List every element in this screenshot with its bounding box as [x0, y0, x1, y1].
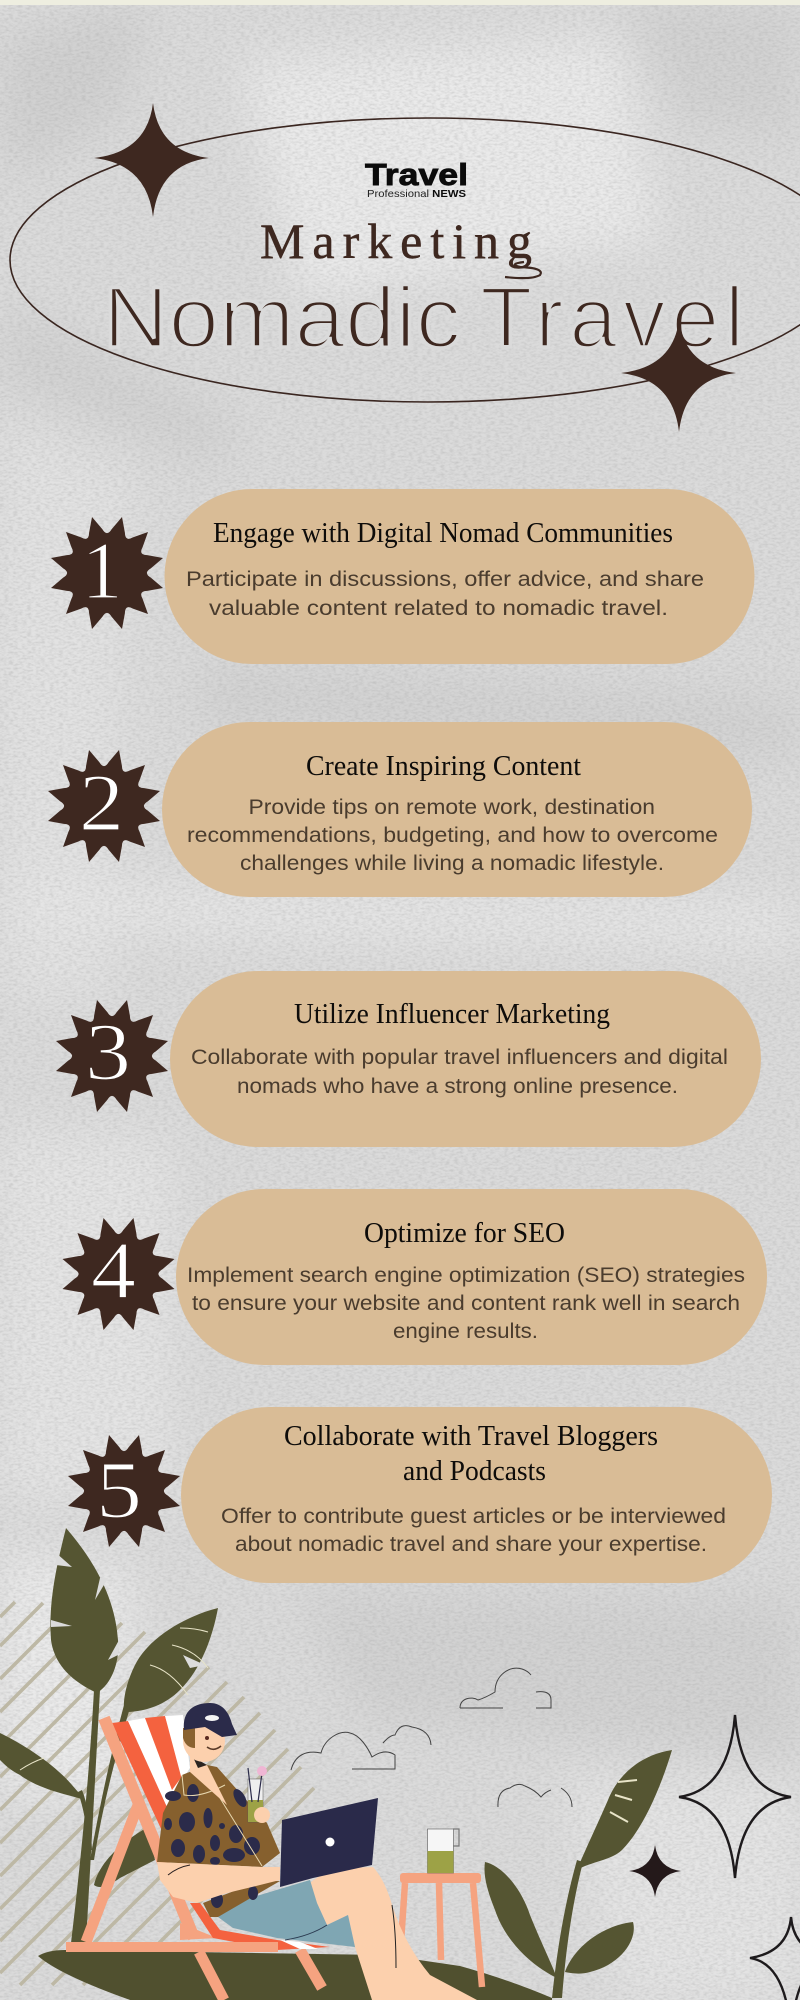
- body 3: Collaborate with popular travel influencers and digital: [191, 1046, 728, 1069]
- plant: left palm leaves: [0, 1528, 218, 1943]
- heading 5: and Podcasts: [403, 1456, 546, 1487]
- body 2: Provide tips on remote work, destination: [248, 796, 655, 819]
- diagonal stripes backdrop: [0, 1602, 314, 1985]
- badge 3: [56, 1000, 168, 1112]
- body 1: [186, 568, 704, 620]
- ground: [38, 1950, 552, 2000]
- badge 4: [62, 1218, 174, 1330]
- cap: [184, 1703, 237, 1737]
- pill 1: [164, 489, 754, 664]
- number 4: 4: [91, 1225, 136, 1316]
- title: Marketing: Marketing: [260, 213, 532, 269]
- number 5: 5: [96, 1444, 142, 1535]
- body 2: recommendations, budgeting, and how to overcome: [187, 824, 718, 847]
- heading 2: Create Inspiring Content: [306, 751, 581, 782]
- title oval outline: [10, 118, 800, 402]
- pill 2: [162, 722, 752, 897]
- heading 4: Optimize for SEO: [364, 1218, 565, 1249]
- title: Nomadic Travel: Nomadic: [103, 270, 461, 366]
- body 5: [221, 1505, 726, 1556]
- body 1: valuable content related to nomadic travel.: [209, 597, 668, 620]
- body 5: about nomadic travel and share your expertise.: [235, 1533, 707, 1556]
- body 5: Offer to contribute guest articles or be interviewed: [221, 1505, 726, 1528]
- badge 2: [48, 750, 160, 862]
- deck chair: [66, 1715, 330, 2000]
- body 1: Participate in discussions, offer advice, and share: [186, 568, 704, 591]
- step 3: [56, 971, 761, 1147]
- arm: [157, 1862, 280, 1903]
- plant: right palm: [484, 1750, 672, 1998]
- badge 5: [68, 1435, 180, 1547]
- number 1: 1: [82, 525, 122, 616]
- heading 5: [284, 1421, 658, 1487]
- number 2: 2: [79, 757, 124, 848]
- body 4: engine results.: [393, 1320, 538, 1343]
- body 2: challenges while living a nomadic lifestyle.: [240, 852, 664, 875]
- icon: outline sparkle: [679, 1715, 791, 1878]
- step 1: [51, 489, 754, 664]
- heading 3: Utilize Influencer Marketing: [294, 999, 610, 1030]
- heading 1: Engage with Digital Nomad Communities: [213, 518, 673, 549]
- pill 5: [181, 1407, 772, 1583]
- neck and face: [190, 1755, 227, 1805]
- number 3: 3: [85, 1006, 131, 1097]
- icon: small dark sparkle: [629, 1845, 681, 1897]
- logo: Travel Professional News: Professional NEWS: [367, 188, 466, 200]
- step 2: [48, 722, 752, 897]
- icon: outline sparkle bottom corner: [750, 1917, 800, 2000]
- heading 5: Collaborate with Travel Bloggers: [284, 1421, 658, 1452]
- logo: Travel Professional News: Travel: [365, 157, 468, 192]
- step 5: [68, 1407, 772, 1583]
- person: [157, 1703, 477, 2000]
- clouds: [291, 1668, 572, 1807]
- body 4: [187, 1264, 745, 1343]
- body 3: [191, 1046, 728, 1098]
- pill 3: [170, 971, 761, 1147]
- laptop: [280, 1798, 378, 1887]
- leg and shorts: [310, 1867, 477, 2000]
- step 4: [62, 1189, 767, 1365]
- leopard shirt: [157, 1765, 280, 1867]
- body 4: to ensure your website and content rank well in search: [192, 1292, 740, 1315]
- side table with pitcher: [398, 1829, 482, 1987]
- icon: sparkle star right: [621, 320, 736, 432]
- icon: sparkle star top left: [94, 103, 209, 217]
- drink: [248, 1779, 263, 1822]
- body 3: nomads who have a strong online presence.: [237, 1075, 678, 1098]
- pill 4: [176, 1189, 767, 1365]
- body 4: Implement search engine optimization (SEO) strategies: [187, 1264, 745, 1287]
- illustration: relaxing nomad with laptop on a deck chair: [0, 1528, 672, 2000]
- title: Nomadic Travel: Travel: [480, 270, 744, 366]
- body 2: [187, 796, 718, 875]
- badge 1: [51, 517, 163, 629]
